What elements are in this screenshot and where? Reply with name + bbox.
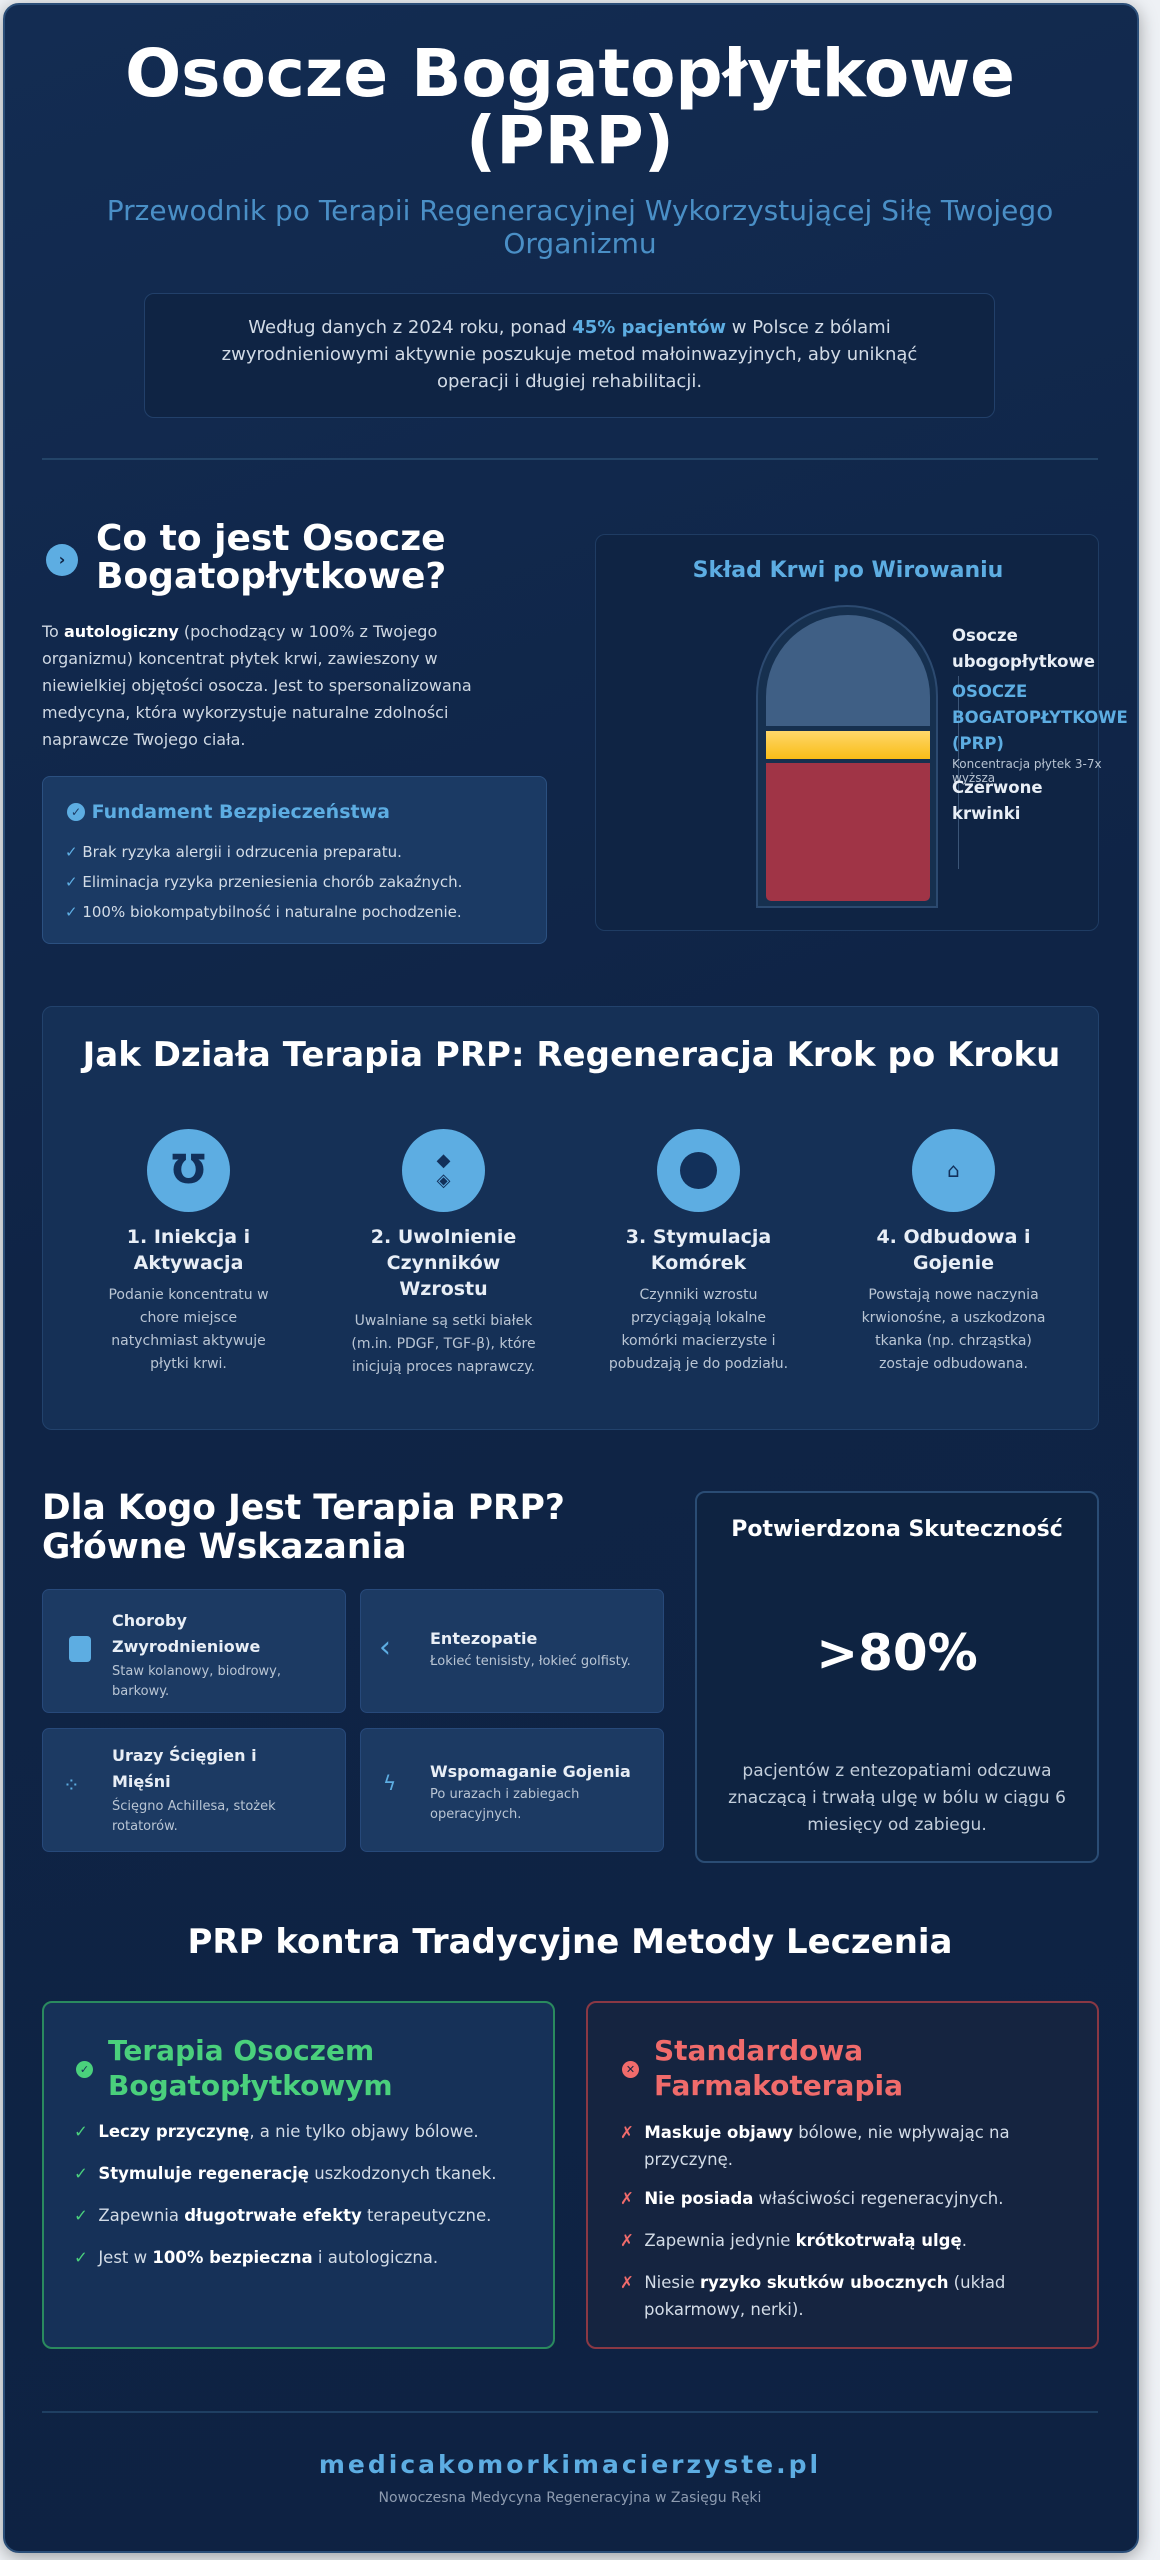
step 2: ◈ <box>437 1170 450 1191</box>
tube <box>756 605 938 908</box>
step 2: ◆ <box>437 1150 450 1171</box>
card: degenerative: Staw kolanowy, biodrowy, barkowy. <box>112 1664 281 1699</box>
panel: pharmacotherapy cons: ✗ Zapewnia jedynie krótkotrwałą ulgę. <box>620 2231 967 2250</box>
safety heading: ✓ <box>71 805 81 819</box>
step 4: ⌂ <box>947 1158 960 1182</box>
step 4: 4. Odbudowa i Gojenie <box>876 1226 1031 1274</box>
card: enthesopathies: Łokieć tenisisty, łokieć golfisty. <box>430 1654 631 1669</box>
panel: pharmacotherapy cons: ✗ Maskuje objawy bólowe, nie wpływając na przyczynę. <box>620 2123 1010 2169</box>
chart labels: OSOCZE BOGATOPŁYTKOWE (PRP) <box>952 682 1128 753</box>
intro stat box <box>144 293 995 418</box>
panel: PRP pros: ✓ Jest w 100% bezpieczna i autologiczna. <box>74 2248 438 2267</box>
icon: arrow circle: › <box>59 550 65 569</box>
step 3: 3. Stymulacja Komórek <box>626 1226 771 1274</box>
safety list <box>65 843 462 921</box>
footer url: medicakomorkimacierzyste.pl <box>319 2450 821 2479</box>
chart labels: Koncentracja płytek 3-7x wyższa <box>952 757 1102 785</box>
card: degenerative <box>42 1589 346 1713</box>
panel: pharmacotherapy cons: ✗ Niesie ryzyko skutków ubocznych (układ pokarmowy, nerki). <box>620 2273 1005 2319</box>
card: enthesopathies: ‹ <box>379 1630 391 1665</box>
panel: pharmacotherapy cons: Standardowa Farmakoterapia <box>654 2034 903 2102</box>
step 1: 1. Iniekcja i Aktywacja <box>127 1226 250 1274</box>
safety list: ✓ 100% biokompatybilność i naturalne pochodzenie. <box>65 903 462 921</box>
safety heading: Fundament Bezpieczeństwa <box>92 801 390 823</box>
step 2: Uwalniane są setki białek (m.in. PDGF, TGF-β), które inicjują proces naprawczy. <box>351 1313 536 1375</box>
card: healing: ϟ <box>383 1771 396 1795</box>
panel: effectiveness stat: Potwierdzona Skuteczność <box>731 1517 1063 1542</box>
panel: PRP pros <box>42 2001 555 2349</box>
title <box>125 35 1015 179</box>
panel: steps <box>42 1006 1099 1430</box>
chart labels: Osocze ubogopłytkowe <box>952 626 1095 671</box>
card: tendon injuries <box>42 1728 346 1852</box>
card: tendon injuries: ⁘ <box>63 1773 80 1797</box>
step 1: Ʊ <box>171 1147 206 1193</box>
step 2: 2. Uwolnienie Czynników Wzrostu <box>371 1226 516 1300</box>
card: tendon injuries: Urazy Ścięgien i Mięśni <box>112 1746 257 1791</box>
panel: PRP pros: Terapia Osoczem Bogatopłytkowym <box>108 2034 393 2102</box>
card: tendon injuries: Ścięgno Achillesa, stożek rotatorów. <box>112 1799 276 1834</box>
section heading: what is PRP: Co to jest Osocze Bogatopłytkowe? <box>96 518 446 597</box>
title: (PRP) <box>466 102 674 179</box>
step 2 <box>351 1129 536 1375</box>
step 3 <box>609 1129 788 1372</box>
chart labels <box>952 626 1128 823</box>
panel: pharmacotherapy cons: ✗ Nie posiada właściwości regeneracyjnych. <box>620 2189 1003 2208</box>
panel: safety <box>42 776 547 944</box>
heading: comparison: PRP kontra Tradycyjne Metody Leczenia <box>187 1922 953 1962</box>
footer tagline: Nowoczesna Medycyna Regeneracyjna w Zasięgu Ręki <box>379 2490 761 2506</box>
steps title: Jak Działa Terapia PRP: Regeneracja Krok po Kroku <box>83 1035 1060 1075</box>
safety list: ✓ Eliminacja ryzyka przeniesienia chorób zakaźnych. <box>65 873 462 891</box>
card: enthesopathies: Entezopatie <box>430 1629 537 1648</box>
panel: effectiveness stat: pacjentów z entezopatiami odczuwa znaczącą i trwałą ulgę w bólu w ciągu 6 miesięcy od zabiegu. <box>728 1761 1066 1835</box>
panel: effectiveness stat: >80% <box>816 1624 978 1682</box>
card: healing: Wspomaganie Gojenia <box>430 1762 631 1781</box>
subtitle: Przewodnik po Terapii Regeneracyjnej Wykorzystującej Siłę Twojego Organizmu <box>107 194 1053 260</box>
step 4: Powstają nowe naczynia krwionośne, a uszkodzona tkanka (np. chrząstka) zostaje odbudowana. <box>862 1287 1045 1372</box>
panel: PRP pros: ✓ Zapewnia długotrwałe efekty terapeutyczne. <box>74 2206 491 2225</box>
step 4 <box>862 1129 1045 1372</box>
title: Osocze Bogatopłytkowe <box>125 35 1015 112</box>
chart title: Skład Krwi po Wirowaniu <box>693 558 1003 583</box>
chart labels: Czerwone krwinki <box>952 778 1043 823</box>
step 3: Czynniki wzrostu przyciągają lokalne komórki macierzyste i pobudzają je do podziału. <box>609 1287 788 1372</box>
panel: PRP pros: ✓ <box>80 2063 89 2076</box>
panel: PRP pros: ✓ Leczy przyczynę, a nie tylko objawy bólowe. <box>74 2122 479 2141</box>
paragraph: To autologiczny (pochodzący w 100% z Twojego organizmu) koncentrat płytek krwi, zawieszony w niewielkiej objętości osocza. Jest to spersonalizowana medycyna, która wykorzystuje naturalne zdolności naprawcze Twojego ciała. <box>42 622 472 749</box>
card: degenerative: Choroby Zwyrodnieniowe <box>112 1611 260 1656</box>
card: enthesopathies <box>360 1589 664 1713</box>
icon: arrow circle <box>46 544 78 576</box>
intro stat box: Według danych z 2024 roku, ponad 45% pacjentów w Polsce z bólami zwyrodnieniowymi aktywnie poszukuje metod małoinwazyjnych, aby uniknąć operacji i długiej rehabilitacji. <box>222 317 917 392</box>
heading: indications: Dla Kogo Jest Terapia PRP? Główne Wskazania <box>42 1488 565 1567</box>
panel: PRP pros: ✓ Stymuluje regenerację uszkodzonych tkanek. <box>74 2164 496 2183</box>
step 1: Podanie koncentratu w chore miejsce natychmiast aktywuje płytki krwi. <box>108 1287 269 1372</box>
panel: blood composition chart <box>595 534 1099 931</box>
card: healing <box>360 1728 664 1852</box>
step 1 <box>108 1129 269 1372</box>
safety list: ✓ Brak ryzyka alergii i odrzucenia preparatu. <box>65 843 402 861</box>
panel: pharmacotherapy cons: ✕ <box>626 2063 635 2076</box>
panel: pharmacotherapy cons <box>586 2001 1099 2349</box>
panel: effectiveness stat <box>695 1491 1099 1863</box>
card: healing: Po urazach i zabiegach operacyjnych. <box>430 1787 579 1822</box>
